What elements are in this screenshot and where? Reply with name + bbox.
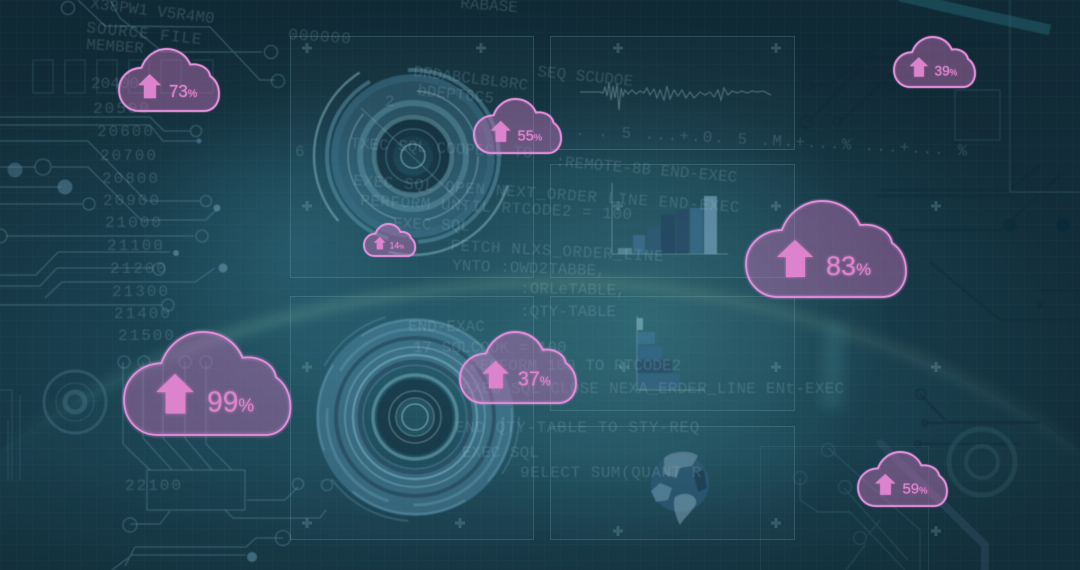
code text: centre column: :QTY-TABLE [520, 303, 616, 321]
code text: centre column: PERFORM UNTIL RTCODE2 = 100 [360, 192, 633, 224]
code text: left column: 21000 [105, 214, 163, 232]
code text: centre column: EXEC SQL OPEN NEXT_ORDER LINE END-EXEC [353, 172, 741, 217]
code text: left column: 20700 [100, 147, 158, 165]
code text: centre column: YNTO :OWD2TABBE, [452, 257, 606, 280]
cloud: 39% [894, 37, 975, 87]
code text: left column: 20800 [102, 170, 160, 188]
code text: centre column: PERFORM 100 TO RTCODE2 [470, 357, 681, 375]
panel: globe [550, 426, 794, 540]
cloud: 14%: 14% [390, 240, 404, 251]
cloud: 83%: 83% [826, 251, 871, 281]
code text: left column: 20900 [103, 192, 161, 210]
bar chart [612, 183, 728, 255]
code text: left column [85, 0, 215, 495]
panel: horizontal bar chart [550, 296, 794, 410]
cloud: 59%: 59% [902, 481, 928, 498]
code text: centre column: 17 SQLCODK = 100 [413, 339, 567, 357]
code text: left column: SOURCE FILE [85, 19, 203, 49]
panel: bottom left [290, 296, 534, 540]
cloud: 83% [746, 201, 906, 297]
panel: faint lower right [760, 446, 928, 570]
code text: left column: 21400 [114, 305, 172, 323]
cloud: 14% [364, 224, 415, 256]
cloud: 73%: 73% [169, 81, 198, 101]
panel: top right waveform [550, 36, 794, 150]
code text: centre column: EXEC SQL [393, 215, 470, 236]
cloud: 59% [858, 452, 947, 506]
code text: centre column: END QTY-TABLE TO STY-REQ [455, 419, 700, 437]
code text: left column: 20500 [93, 100, 151, 118]
code text: centre column: bDEPT6C5 [416, 82, 495, 108]
code text: centre column: FETCH NLXS_ORDER_LINE [450, 237, 665, 266]
code text: centre column: :REMOTE-8B END-EXEC [555, 153, 738, 187]
code text: centre column: . . 5 ...+.0. 5 .M.+...% ...+... % [575, 122, 970, 161]
cloud: 55% [474, 99, 561, 153]
panel corner markers [302, 43, 941, 536]
code text: centre column: 000000 [288, 26, 352, 48]
code text: centre column: DRDABCLBL8RC [412, 63, 529, 95]
code text: centre column: 2 [385, 93, 395, 111]
code text: left column: 20400 [91, 75, 139, 93]
code text: left column: 21100 [107, 237, 165, 255]
code text: left column: 20600 [97, 123, 155, 141]
panel: middle right bar chart [550, 164, 794, 278]
code text: centre column: 6 [295, 143, 305, 161]
icon: globe [651, 452, 709, 525]
code text: centre column: 9ELECT SUM(QUANT R [520, 464, 702, 482]
code text: centre column: END-EXAC [408, 318, 485, 336]
circuit lines: left side [0, 0, 332, 570]
code text: centre column: TXEC SQL COOPECL TO [350, 135, 533, 163]
concentric dial: bottom [311, 313, 519, 521]
code text: centre column: SEQ SCUDOE [536, 63, 634, 91]
cloud: 37% [460, 332, 576, 403]
code text: centre column: :ORLeTABLE, [520, 280, 626, 300]
concentric dial: top [314, 57, 512, 255]
cloud: 55%: 55% [518, 127, 543, 145]
code text: left column: MEMBER [86, 36, 145, 58]
panel: top left [290, 36, 534, 278]
circuit lines: right side [794, 0, 1080, 570]
cloud: 73% [119, 49, 219, 111]
code text: centre column: EXEC SQL [462, 444, 539, 462]
waveform chart [580, 83, 771, 110]
cloud: 99% [124, 332, 290, 435]
code text: left column: 21500 [118, 327, 176, 345]
code text: left column: 22100 [125, 477, 183, 495]
horizontal bar chart [637, 316, 705, 390]
code text: centre column [288, 0, 970, 482]
code text: left column: 21300 [112, 283, 170, 301]
code text: left column: 21200 [110, 260, 168, 278]
code text: centre column: EXEC SQL CLOSE NEXA_ERDER_LINE ENt-EXEC [462, 380, 844, 398]
cloud: 99%: 99% [207, 386, 254, 419]
cloud: 37%: 37% [518, 368, 551, 390]
cloud: 39%: 39% [934, 62, 958, 79]
